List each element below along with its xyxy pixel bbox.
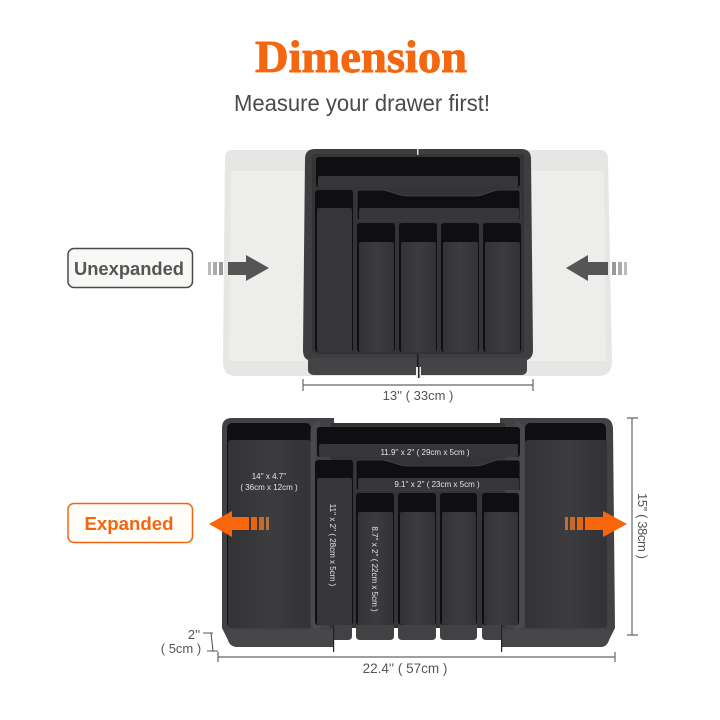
- label: unexpanded: [68, 248, 192, 288]
- ghost extended tray: [223, 150, 612, 376]
- dimension: 2 inch height: ( 5cm ): [161, 641, 201, 656]
- dimension: 15 inch: [627, 418, 650, 635]
- dimension: 2 inch height: [161, 627, 218, 656]
- label: unexpanded: Unexpanded: [74, 258, 184, 279]
- dimension: 15 inch: 15'' ( 38cm ): [635, 493, 650, 559]
- dimension: 13 inch: 13'' ( 33cm ): [383, 388, 453, 403]
- tray middle section: [330, 423, 505, 640]
- sliding rails: [313, 424, 522, 628]
- subtitle: Measure your drawer first!: [234, 90, 490, 116]
- compartment measurements: 11'' x 2'' ( 28cm x 5cm ): [328, 504, 337, 587]
- left wing: [222, 418, 334, 652]
- compartment measurements: 8.7'' x 2'' ( 22cm x 5cm ): [370, 526, 379, 612]
- arrow: left grey inward: [208, 255, 269, 281]
- arrow: right grey inward: [566, 255, 627, 281]
- tray body: [303, 149, 533, 378]
- panel: expanded tray: [222, 418, 615, 652]
- dimension: 22.4 inch: [218, 652, 615, 676]
- arrow: left orange outward: [209, 511, 269, 537]
- label: expanded: [68, 504, 192, 542]
- compartment measurements: 14'' x 4.7'': [252, 472, 287, 481]
- right wing: [500, 418, 615, 652]
- arrow: right orange outward: [565, 511, 627, 537]
- compartment measurements: ( 36cm x 12cm ): [240, 483, 298, 492]
- panel: unexpanded tray: [223, 149, 612, 378]
- compartment measurements: [240, 448, 480, 612]
- dimension: 22.4 inch: 22.4'' ( 57cm ): [363, 661, 447, 676]
- dimension: 2 inch height: 2'': [188, 627, 200, 642]
- label: expanded: Expanded: [84, 513, 174, 534]
- compartment measurements: 11.9'' x 2'' ( 29cm x 5cm ): [380, 448, 470, 457]
- tray compartments: [315, 427, 520, 625]
- compartment measurements: 9.1'' x 2'' ( 23cm x 5cm ): [394, 480, 480, 489]
- title: Dimension: [255, 31, 467, 82]
- dimension: 13 inch: [303, 379, 533, 403]
- tray compartments: [315, 157, 521, 352]
